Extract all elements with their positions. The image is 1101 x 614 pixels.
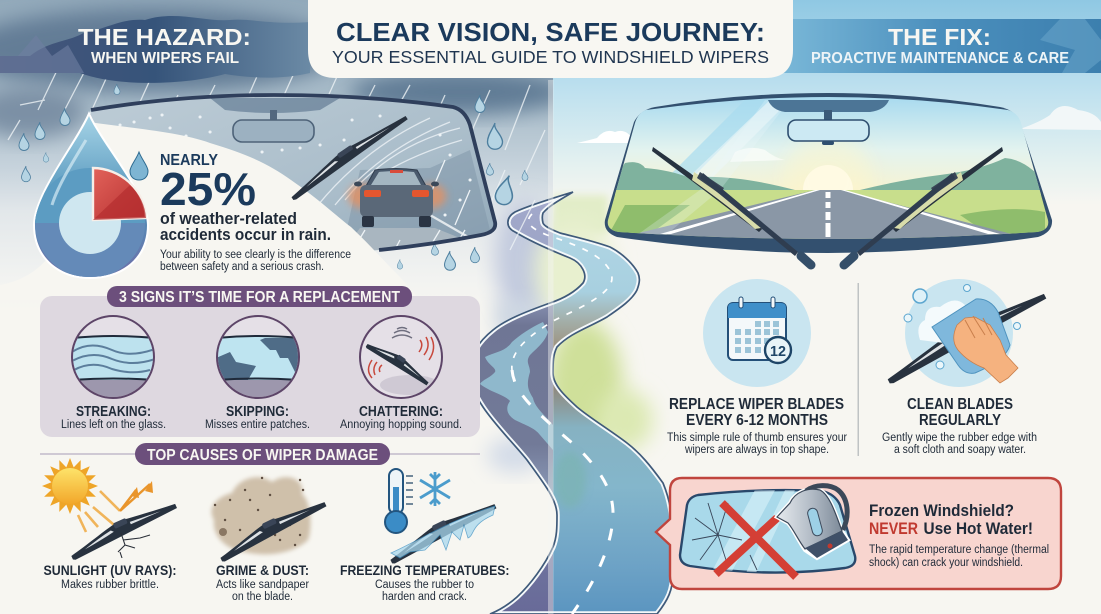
banner subheading: WHEN WIPERS FAIL: [91, 50, 239, 67]
subtitle: YOUR ESSENTIAL GUIDE TO WINDSHIELD WIPERS: [332, 47, 769, 67]
car with tail lights: [354, 168, 439, 227]
icon: water drop with 25 percent pie: [35, 116, 148, 278]
replace heading line two: EVERY 6-12 MONTHS: [686, 412, 828, 429]
rear-view mirror: [788, 110, 869, 145]
sign: chattering: [340, 404, 462, 431]
cause: grime: Acts like sandpaper: [216, 579, 309, 591]
right wiper: [844, 147, 1003, 265]
clean heading: CLEAN BLADES: [907, 396, 1013, 413]
sign: streaking: STREAKING:: [76, 404, 151, 420]
cause: grime: on the blade.: [232, 591, 293, 603]
stat line two: accidents occur in rain.: [160, 226, 331, 244]
cause: freezing: Causes the rubber to: [375, 579, 474, 591]
cause: freezing: FREEZING TEMPERATUBES:: [340, 562, 510, 578]
stat note line two: between safety and a serious crash.: [160, 261, 324, 273]
icon: thermometer, snowflake and frozen blade: [385, 469, 499, 565]
banner heading: THE HAZARD:: [78, 24, 251, 50]
main title: CLEAR VISION, SAFE JOURNEY:: [336, 17, 765, 47]
sign: skipping: Misses entire patches.: [205, 419, 310, 431]
icon: calendar: 12: [770, 343, 786, 360]
title card: [308, 0, 793, 78]
cause: sunlight: [44, 562, 176, 591]
icon: cracked windshield: [680, 490, 855, 575]
banner heading: THE FIX:: [888, 24, 991, 50]
banner subheading: PROACTIVE MAINTENANCE & CARE: [811, 50, 1069, 67]
rear-view mirror: [233, 110, 314, 142]
small drop: [130, 152, 148, 180]
stat lead-in: NEARLY: [160, 152, 218, 169]
panel: three signs: [40, 286, 480, 437]
icon: calendar: [728, 297, 791, 363]
warning text: The rapid temperature change (thermal: [869, 544, 1049, 556]
icon: grime on blade: [211, 477, 329, 563]
replace text line two: wipers are always in top shape.: [684, 444, 829, 456]
icon: chattering blade: [360, 316, 442, 398]
icon: red X: [716, 503, 796, 577]
statistic text: [160, 152, 351, 273]
warning heading: hot water: Use Hot Water!: [924, 519, 1033, 538]
cause: freezing: harden and crack.: [382, 591, 467, 603]
cause: grime: [216, 562, 309, 603]
sign: streaking: Lines left on the glass.: [61, 419, 166, 431]
section: top causes: [40, 443, 510, 603]
clean text: Gently wipe the rubber edge with: [882, 432, 1037, 444]
icon: wiper blade being wiped: [881, 284, 1049, 385]
replace tip: [667, 279, 847, 456]
sign: skipping: [205, 404, 310, 431]
section heading pill: TOP CAUSES OF WIPER DAMAGE: [147, 447, 378, 464]
clean tip: [881, 279, 1049, 456]
sign: streaking: [61, 404, 166, 431]
clean heading line two: REGULARLY: [919, 412, 1002, 429]
stat number: 25%: [160, 163, 256, 215]
callout: hot water warning: [656, 478, 1061, 589]
sign: chattering: CHATTERING:: [359, 404, 443, 420]
left wiper: [652, 147, 811, 265]
rain streaks: [8, 60, 545, 250]
cause: freezing: [340, 562, 510, 603]
sign: skipping: SKIPPING:: [226, 404, 289, 420]
icon: sun damaging blade: [42, 458, 179, 561]
cause: grime: GRIME & DUST:: [216, 562, 309, 578]
fix banner: [780, 19, 1101, 73]
cause: sunlight: SUNLIGHT (UV RAYS):: [44, 562, 176, 578]
replace text: This simple rule of thumb ensures your: [667, 432, 847, 444]
rain drops: [19, 84, 528, 270]
left wiper on hazard glass: [286, 111, 410, 201]
stat line one: of weather-related: [160, 210, 297, 228]
stat note line one: Your ability to see clearly is the difference: [160, 249, 351, 261]
hazard banner: [0, 16, 310, 83]
cause: sunlight: Makes rubber brittle.: [61, 579, 159, 591]
panel heading pill: 3 SIGNS IT’S TIME FOR A REPLACEMENT: [119, 289, 400, 306]
warning heading: Frozen Windshield?: [869, 501, 1014, 520]
left windshield: rainy view: [90, 95, 495, 260]
clean text line two: a soft cloth and soapy water.: [894, 444, 1026, 456]
storm sky background: [0, 0, 570, 473]
clear sky background: [535, 0, 1101, 450]
white stat swoosh: [0, 122, 420, 300]
replace heading: REPLACE WIPER BLADES: [669, 396, 844, 413]
icon: streaking glass: [70, 316, 156, 400]
icon: kettle: [777, 486, 848, 558]
warning heading: never: NEVER: [869, 519, 918, 538]
icon: skipping glass: [215, 316, 302, 400]
road: winding from storm to clear: [480, 191, 672, 614]
sign: chattering: Annoying hopping sound.: [340, 419, 462, 431]
warning text line two: shock) can crack your windshield.: [869, 557, 1023, 569]
right windshield: clear road view: [600, 93, 1060, 265]
